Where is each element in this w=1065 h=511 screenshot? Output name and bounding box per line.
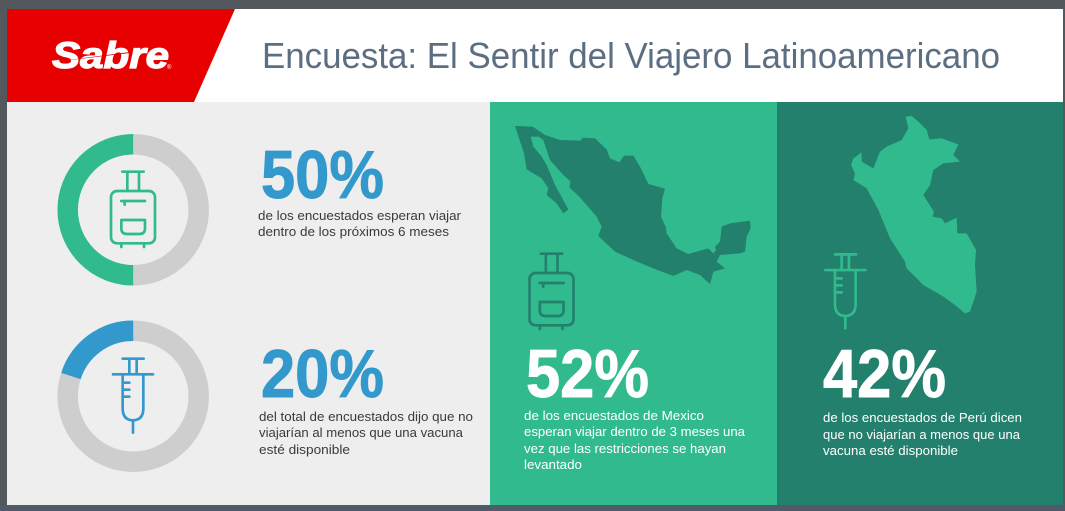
stat: 42%: 42% (823, 336, 946, 412)
text: 50% description (258, 208, 462, 239)
map: Mexico (515, 126, 751, 284)
text: Mexico description: levantado (524, 457, 582, 472)
text: Mexico description: de los encuestados de Mexico (524, 408, 704, 423)
donut chart: 20% (68, 331, 199, 462)
panel: Mexico (490, 102, 777, 505)
icon: syringe (825, 254, 865, 328)
text: Peru description: de los encuestados de Perú dicen (823, 410, 1022, 425)
text: Mexico description: vez que las restricciones se hayan (524, 441, 726, 456)
text: 20% description: del total de encuestados dijo que no (259, 409, 473, 424)
icon: syringe (113, 359, 153, 433)
text: Mexico description (524, 408, 746, 472)
text: Peru description (823, 410, 1022, 458)
map: Peru (851, 116, 977, 313)
text: Peru description: vacuna esté disponible (823, 443, 958, 458)
icon: suitcase (111, 172, 155, 247)
donut chart: 50% (68, 144, 199, 275)
text: 50% description: de los encuestados esperan viajar (258, 208, 462, 223)
logo block: ® (167, 64, 172, 71)
title: Encuesta: El Sentir del Viajero Latinoamericano (262, 35, 1000, 76)
panel: Peru (777, 102, 1063, 505)
text: Peru description: que no viajarían a menos que una (823, 427, 1021, 442)
stat: 52%: 52% (526, 336, 649, 412)
text: 20% description (259, 409, 473, 457)
panel: encuesta general (7, 102, 490, 505)
text: 50% description: dentro de los próximos 6 meses (258, 224, 450, 239)
header (7, 9, 1063, 102)
stat: 20%: 20% (261, 336, 384, 412)
icon: suitcase (529, 254, 573, 329)
text: 20% description: esté disponible (259, 442, 350, 457)
text: 20% description: viajarían al menos que una vacuna (259, 425, 464, 440)
text: Mexico description: esperan viajar dentro de 3 meses una (524, 424, 746, 439)
stat: 50%: 50% (261, 137, 384, 213)
logo block: Sabre (52, 35, 169, 76)
logo block (7, 9, 235, 102)
